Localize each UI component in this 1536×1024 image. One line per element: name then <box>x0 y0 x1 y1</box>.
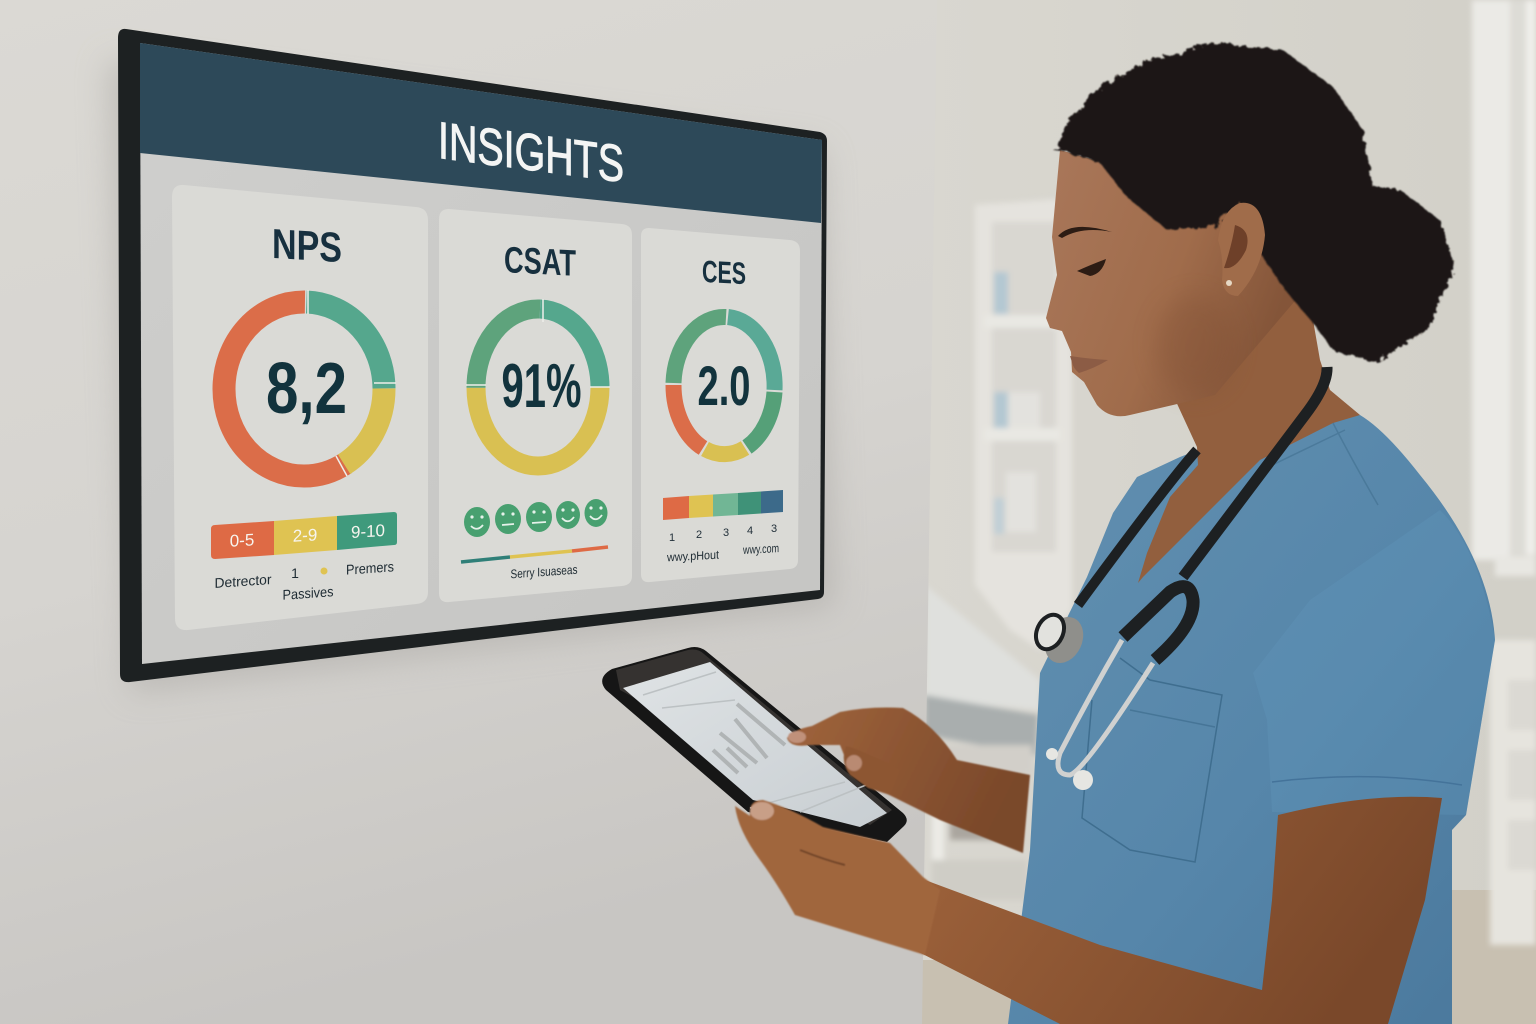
torso: blue scrubs <box>1008 415 1495 1024</box>
scale numbers: 1 <box>669 532 675 544</box>
metal binaurals <box>1058 640 1153 775</box>
heading: CSAT: CSAT <box>504 238 576 284</box>
heading: NPS: NPS <box>272 220 342 271</box>
scale bar: NPS: 0-5 <box>230 530 254 551</box>
rating line <box>461 547 608 562</box>
legend: NPS <box>214 558 394 603</box>
icon: smile face 5 <box>584 499 608 527</box>
hair <box>1055 42 1455 363</box>
thumbnail <box>750 802 774 820</box>
panel: NPS <box>172 185 428 630</box>
scale bar: NPS <box>211 512 397 559</box>
heading: CES: CES <box>702 254 746 291</box>
head and face <box>1046 150 1300 416</box>
value: CSAT score: 91% <box>502 352 582 421</box>
eye <box>1077 259 1106 276</box>
tablet <box>602 647 907 842</box>
scale numbers: 3 <box>723 527 729 539</box>
header band <box>140 43 822 223</box>
scale bar: NPS: 2-9 <box>293 525 317 546</box>
legend: NPS: Detrector <box>214 571 272 591</box>
cabinet <box>1490 640 1536 945</box>
lips <box>1070 356 1108 373</box>
display screen <box>140 43 822 664</box>
shelf unit <box>975 198 1072 650</box>
caption: CES right: wwy.com <box>742 541 779 557</box>
finger nails <box>788 731 806 743</box>
floor <box>920 890 1536 1024</box>
nurse <box>602 42 1495 1024</box>
icon: neutral face 3 <box>526 502 552 532</box>
scale numbers: 2 <box>696 529 702 541</box>
collar seam <box>1262 423 1378 505</box>
title: INSIGHTS <box>438 112 624 194</box>
pocket <box>1082 658 1222 862</box>
caption: CES left: wwy.pHout <box>666 548 720 564</box>
stethoscope <box>1031 367 1327 790</box>
scale bar: NPS: 9-10 <box>351 521 385 542</box>
neck and V of neckline <box>1138 220 1360 583</box>
monitor shadow <box>108 60 834 692</box>
curled fingers <box>844 746 900 795</box>
tube left <box>1078 450 1197 605</box>
rating faces <box>464 499 608 537</box>
tablet top bezel <box>616 650 892 825</box>
legend: NPS: Premers <box>346 558 394 578</box>
legend: NPS: Passives <box>282 583 334 603</box>
donut chart: CSAT <box>466 299 610 466</box>
caption: CSAT: Serry Isuaseas <box>510 563 578 581</box>
donut chart: CES <box>673 317 775 454</box>
tablet bar chart <box>713 704 785 773</box>
cheek shade <box>1155 295 1235 395</box>
headset yoke <box>1123 587 1193 660</box>
ear <box>1218 203 1265 296</box>
sleeve hem <box>1272 777 1462 785</box>
icon: neutral face 2 <box>495 504 521 534</box>
panel: CSAT <box>439 209 632 602</box>
donut chart: NPS <box>224 290 396 476</box>
tablet body <box>602 647 907 842</box>
sleeve shade <box>1253 510 1495 815</box>
thumb crease <box>800 850 845 865</box>
scale numbers <box>669 523 777 544</box>
legend: NPS: 1 <box>291 565 299 581</box>
tube main <box>1183 367 1327 577</box>
wall display <box>118 29 827 682</box>
wall <box>0 0 937 1024</box>
earring <box>1226 280 1232 286</box>
value: NPS score: 8,2 <box>266 349 347 429</box>
hand: holding tablet <box>735 800 940 955</box>
panel: CES <box>641 228 800 582</box>
scale bar: CES <box>663 490 783 520</box>
earpieces <box>1046 748 1093 790</box>
upper arm and forearm <box>905 797 1442 1024</box>
chest piece <box>1031 610 1090 669</box>
tablet screen <box>623 662 887 827</box>
exam bed <box>925 585 1040 900</box>
hand: pointing <box>787 708 1030 853</box>
tablet lines <box>643 672 866 812</box>
inner ear <box>1224 225 1248 268</box>
icon: smile face 4 <box>556 501 580 529</box>
background: clinic room <box>920 0 1536 1024</box>
window frame <box>1472 0 1536 576</box>
scale numbers: 4 <box>747 525 753 537</box>
value: CES score: 2.0 <box>698 354 750 417</box>
display bezel <box>118 29 827 682</box>
eyebrow <box>1058 227 1112 238</box>
scale numbers: 3 <box>771 523 777 535</box>
icon: smile face 1 <box>464 507 490 537</box>
